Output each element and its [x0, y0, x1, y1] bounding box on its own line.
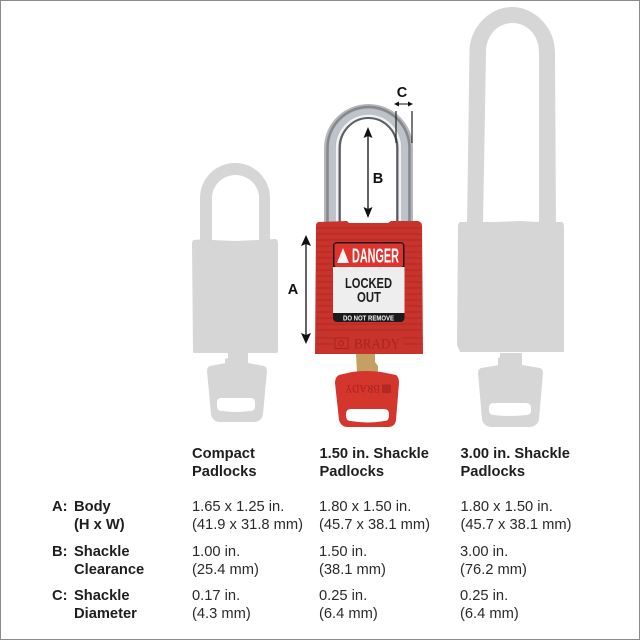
steel shackle: [324, 104, 413, 226]
row label B: Shackle: [74, 544, 130, 560]
column heading: 1.50 in.: 1.50 in. Shackle: [320, 446, 429, 462]
danger label: [333, 242, 404, 322]
row label B: Clearance: [74, 562, 144, 578]
locked out text: LOCKED: [345, 275, 392, 292]
row C values: 1.50 in.: 0.25 in.: [319, 588, 367, 604]
brady logo on body: BRADY: [354, 336, 400, 352]
key brand: BRADY: [344, 382, 380, 394]
row label C: C:: [52, 588, 68, 604]
row B values: 3.00 in.: (76.2 mm): [460, 562, 527, 578]
row A values: compact: 1.65 x 1.25 in.: [192, 499, 284, 515]
dimension A arrow: A: [288, 282, 299, 298]
row C values: 3.00 in.: 0.25 in.: [460, 588, 508, 604]
row label A: (H x W): [74, 517, 125, 533]
row A values: 1.50 in.: (45.7 x 38.1 mm): [319, 517, 430, 533]
compact padlock silhouette: [192, 163, 278, 422]
column heading: 1.50 in.: Padlocks: [320, 464, 384, 480]
red key head: [335, 371, 399, 427]
row A values: 3.00 in.: 1.80 x 1.50 in.: [460, 499, 553, 515]
column heading: 3.00 in.: 3.00 in. Shackle: [460, 446, 570, 462]
row label C: Diameter: [74, 606, 137, 622]
row label A: A:: [52, 499, 68, 515]
row C values: 1.50 in.: (6.4 mm): [319, 606, 378, 622]
row B values: 1.50 in.: (38.1 mm): [319, 562, 386, 578]
dimension A arrow: [288, 235, 311, 344]
brass key stem: [356, 354, 378, 373]
red 1.50 in. shackle padlock photo: [315, 104, 423, 427]
row A values: 1.50 in.: 1.80 x 1.50 in.: [319, 499, 411, 515]
warning triangle: [337, 248, 349, 263]
body ribs: [316, 228, 423, 344]
row C values: compact: (4.3 mm): [192, 606, 251, 622]
do not remove text: DO NOT REMOVE: [343, 313, 394, 322]
dimension C arrow: C: [397, 85, 408, 101]
row label A: Body: [74, 499, 112, 515]
row label C: Shackle: [74, 588, 130, 604]
3.00 in. shackle padlock silhouette: [457, 7, 564, 427]
column heading: compact: Padlocks: [192, 464, 256, 480]
row B values: compact: (25.4 mm): [192, 562, 259, 578]
row B values: 1.50 in.: 1.50 in.: [319, 544, 367, 560]
column heading: 3.00 in.: Padlocks: [460, 464, 525, 480]
column heading: compact: Compact: [192, 446, 255, 462]
danger word: DANGER: [352, 246, 399, 268]
row B values: 3.00 in.: 3.00 in.: [460, 544, 508, 560]
red lock body: [315, 221, 423, 354]
row B values: compact: 1.00 in.: [192, 544, 240, 560]
row C values: compact: 0.17 in.: [192, 588, 240, 604]
brady logo on body: [335, 336, 400, 352]
dimension B arrow: B: [373, 171, 383, 187]
row C values: 3.00 in.: (6.4 mm): [460, 606, 519, 622]
dimension C arrow: [394, 85, 413, 143]
row A values: 3.00 in.: (45.7 x 38.1 mm): [460, 517, 572, 533]
row label B: B:: [52, 544, 68, 560]
row A values: compact: (41.9 x 31.8 mm): [192, 517, 303, 533]
dimension B arrow: [364, 127, 383, 218]
danger label: OUT: [357, 289, 381, 306]
key brand: [344, 382, 391, 394]
